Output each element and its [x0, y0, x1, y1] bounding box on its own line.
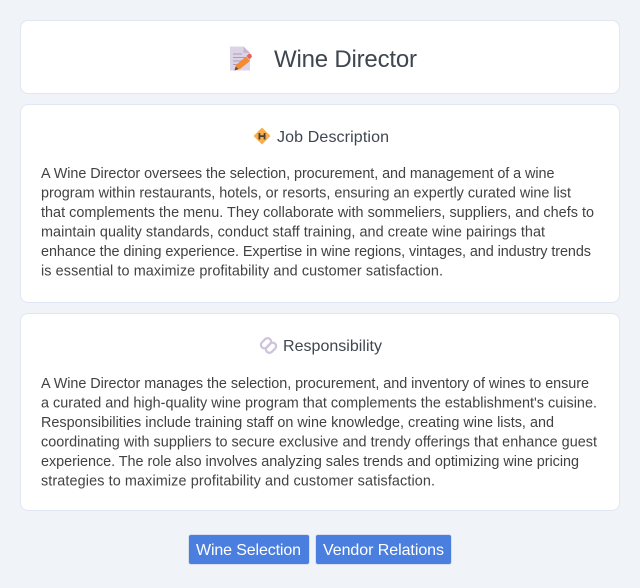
job description text: is essential to maximize profitability and customer satisfaction.: [41, 264, 443, 280]
panel: job description card: [20, 104, 620, 303]
icon: chain link: [259, 337, 278, 354]
responsibility text: experience. The role also involves analyzing sales trends and optimizing wine pricing: [41, 454, 579, 470]
tag button: vendor relations background: [316, 535, 451, 564]
panel: responsibility card: [20, 313, 620, 511]
job description text: maintain quality standards, conduct staff training, and create wine pairings that: [41, 224, 545, 240]
job description text: that complements the menu. They collaborate with sommeliers, suppliers, and chefs to: [41, 205, 594, 221]
panel: title card: [20, 20, 620, 94]
button label: Wine Selection: Wine Selection: [196, 542, 301, 559]
responsibility text: coordinating with suppliers to secure exclusive and trendy offerings that enhance guest: [41, 434, 597, 450]
icon: memo with pencil: [230, 46, 252, 70]
button label: Vendor Relations: Vendor Relations: [323, 542, 444, 559]
responsibility text: a curated and high-quality wine program that complements the establishment's cuisine.: [41, 396, 597, 412]
job description text: program within restaurants, hotels, or resorts, ensuring an expertly curated wine list: [41, 186, 571, 202]
responsibility text: strategies to maximize profitability and customer satisfaction.: [41, 474, 435, 490]
responsibility text: Responsibilities include training staff on wine knowledge, creating wine lists, and: [41, 415, 554, 431]
tag button: wine selection background: [189, 535, 309, 564]
job description text: enhance the dining experience. Expertise in wine regions, vintages, and industry trends: [41, 244, 591, 260]
job description text: A Wine Director oversees the selection, procurement, and management of a wine: [41, 166, 554, 182]
heading: Responsibility: Responsibility: [283, 338, 382, 355]
job description text: [41, 166, 594, 280]
heading: Wine Director: Wine Director: [274, 46, 417, 73]
icon: orange diamond sign: [254, 128, 270, 144]
heading: Job Description: Job Description: [277, 129, 389, 146]
responsibility text: [41, 376, 597, 490]
responsibility text: A Wine Director manages the selection, procurement, and inventory of wines to ensure: [41, 376, 589, 392]
